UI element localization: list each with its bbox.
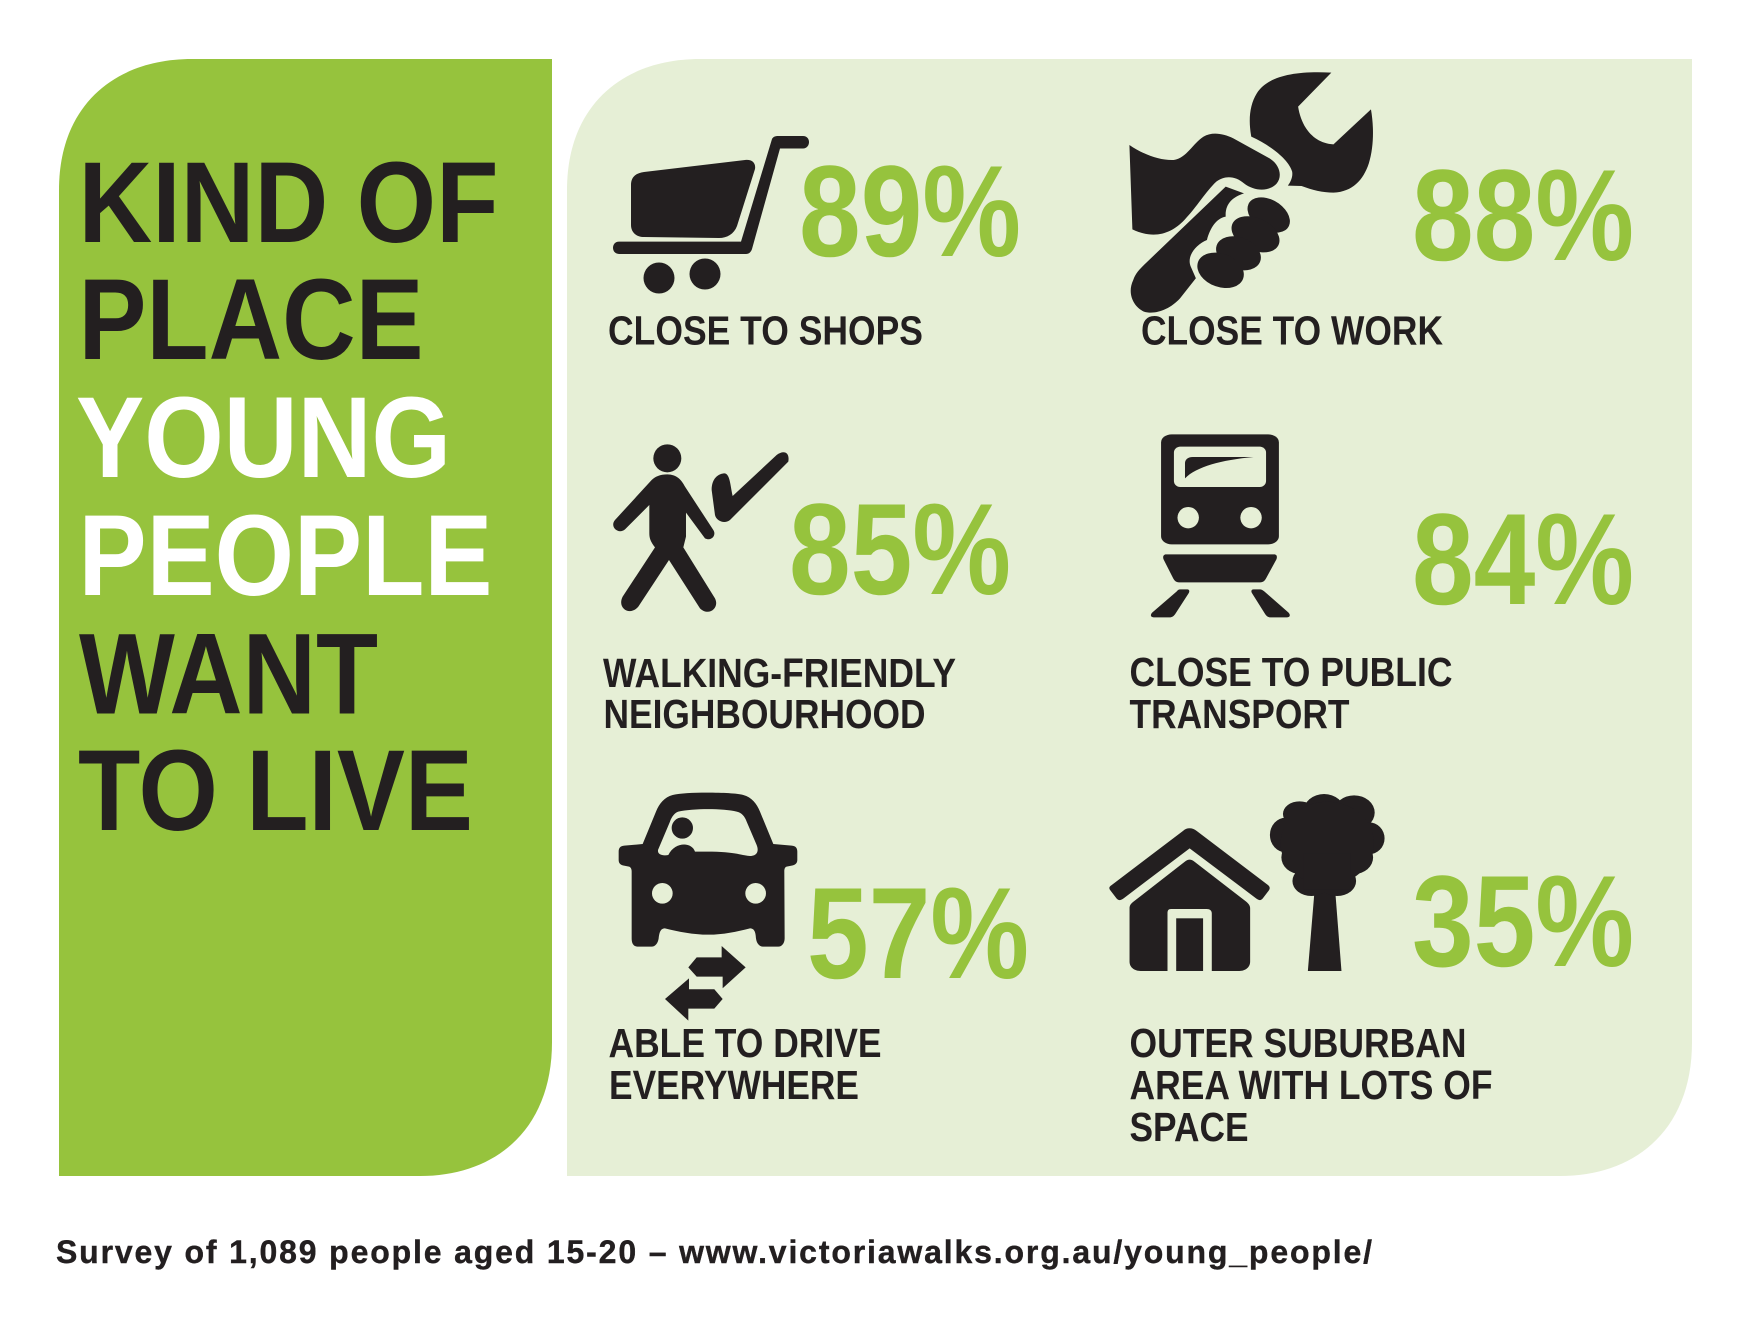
percentage: 85: 85% [789,476,1011,622]
footer source line: Survey of 1,089 people aged 15-20 – www.victoriawalks.org.au/young_people/ [56,1234,1372,1270]
label: close to public transport: TRANSPORT [1130,691,1350,737]
icon: house and tree [1109,794,1385,971]
stat: able to drive everywhere [608,793,1029,1108]
panel: light results panel [567,59,1692,1176]
icon: shopping cart [613,136,809,294]
label: close to work: CLOSE TO WORK [1141,308,1443,354]
label: close to public transport [1130,649,1452,737]
label: able to drive everywhere: EVERYWHERE [609,1062,859,1108]
percentage: 57: 57% [807,860,1029,1006]
label: outer suburban area with lots of space: AREA WITH LOTS OF [1130,1062,1492,1108]
title: WANT [79,610,378,738]
percentage: 84: 84% [1412,486,1634,632]
percentage: 35: 35% [1412,848,1634,994]
label: close to shops: CLOSE TO SHOPS [608,308,923,354]
percentage: 88: 88% [1412,142,1634,288]
stat: walking-friendly neighbourhood [603,444,1011,737]
title: TO LIVE [78,727,473,855]
label: outer suburban area with lots of space: SPACE [1130,1104,1248,1150]
stat: close to work [1129,72,1634,354]
icon: train [1151,434,1290,617]
title: PEOPLE [78,492,492,620]
label: walking-friendly neighbourhood: WALKING-FRIENDLY [603,650,956,696]
stat: outer suburban area [1109,794,1634,1150]
title: KIND OF [78,139,498,267]
label: able to drive everywhere [608,1020,882,1108]
icon: car with arrows [619,793,797,1021]
stat: close to shops [608,136,1021,354]
percentage: 89: 89% [799,138,1021,284]
title: YOUNG [76,374,451,502]
title [76,139,498,855]
icon: hand holding wrench [1129,72,1373,313]
label: outer suburban area with lots of space [1130,1020,1492,1150]
label: outer suburban area with lots of space: OUTER SUBURBAN [1130,1020,1466,1066]
label: able to drive everywhere: ABLE TO DRIVE [608,1020,882,1066]
title: PLACE [78,256,424,384]
stat: close to public transport [1130,434,1634,737]
panel: green title panel [59,59,552,1176]
label: walking-friendly neighbourhood [603,650,956,737]
icon: walking person with tick [613,444,789,612]
label: close to public transport: CLOSE TO PUBLIC [1130,649,1452,695]
label: walking-friendly neighbourhood: NEIGHBOURHOOD [604,691,926,737]
